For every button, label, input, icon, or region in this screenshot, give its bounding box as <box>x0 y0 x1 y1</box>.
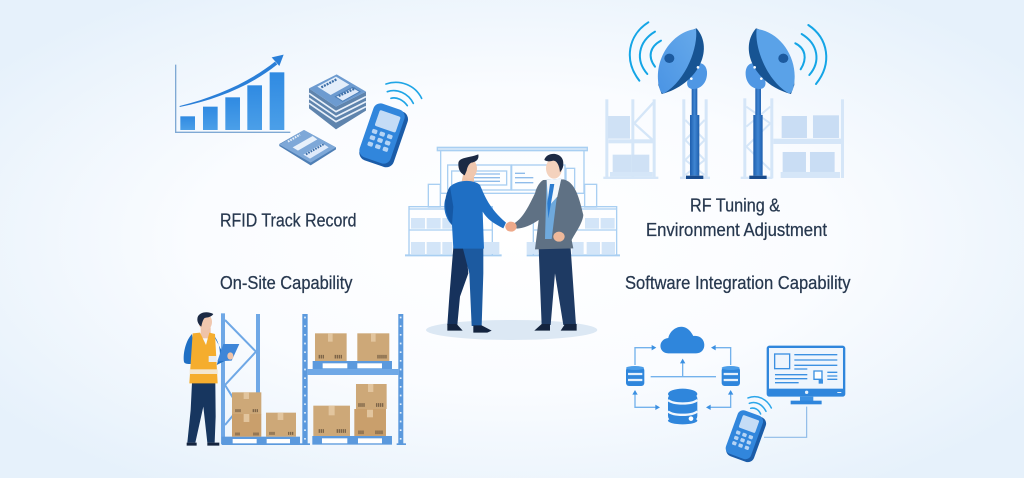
ground shadow <box>426 320 597 340</box>
panel: on-site capability <box>184 312 406 446</box>
person: warehouse worker with clipboard <box>184 312 239 446</box>
handshake <box>505 222 517 232</box>
icon: handheld RFID reader <box>723 409 768 464</box>
warehouse backdrop <box>405 147 620 255</box>
bar chart with rising arrow <box>176 55 290 132</box>
panel: RF tuning and environment adjustment <box>603 22 844 179</box>
right dish feed knob <box>778 54 788 63</box>
cardboard boxes on left rack <box>232 392 296 437</box>
icon: right antenna <box>746 25 826 179</box>
heading: RF Tuning and Environment Adjustment <box>646 196 827 240</box>
heading: Software Integration Capability: Software Integration Capability <box>625 273 850 293</box>
left pallet rack <box>221 313 300 445</box>
signal arcs <box>630 22 661 81</box>
heading: RF Tuning and Environment Adjustment: RF Tuning & <box>690 196 780 216</box>
heading: RFID Track Record: RFID Track Record <box>220 210 356 230</box>
right dish <box>749 28 795 94</box>
panel: RFID track record <box>176 55 422 169</box>
person: right businessman <box>514 154 583 331</box>
panel: software integration capability <box>626 327 845 464</box>
heading: On-Site Capability: On-Site Capability <box>220 273 352 293</box>
dish feed knob <box>664 54 674 63</box>
person: left businessman <box>444 154 506 333</box>
icon: left antenna <box>630 22 707 179</box>
faded warehouse racks <box>603 98 844 179</box>
antenna bracket <box>687 63 707 89</box>
right signal arcs <box>795 25 826 84</box>
icon: left database <box>626 366 644 386</box>
icon: RFID card <box>279 130 336 165</box>
right pallet rack <box>300 314 406 445</box>
reader to monitor connector <box>764 407 807 437</box>
icon: right database <box>722 366 740 386</box>
antenna pole <box>686 88 703 179</box>
connector arrows <box>632 345 733 410</box>
dish <box>658 28 704 94</box>
right antenna bracket <box>746 63 766 89</box>
icon: stack of RFID cards <box>309 74 366 129</box>
cardboard boxes on right rack <box>313 333 389 436</box>
heading: RF Tuning and Environment Adjustment: Environment Adjustment <box>646 220 827 240</box>
icon: radio waves <box>748 397 771 414</box>
icon: central database <box>668 389 697 424</box>
icon: radio waves <box>386 82 422 106</box>
icon: computer monitor <box>767 346 845 404</box>
icon: cloud <box>660 327 704 353</box>
icon: handheld RFID reader <box>357 101 411 169</box>
right antenna pole <box>749 88 767 179</box>
panel: central handshake scene <box>405 147 620 340</box>
